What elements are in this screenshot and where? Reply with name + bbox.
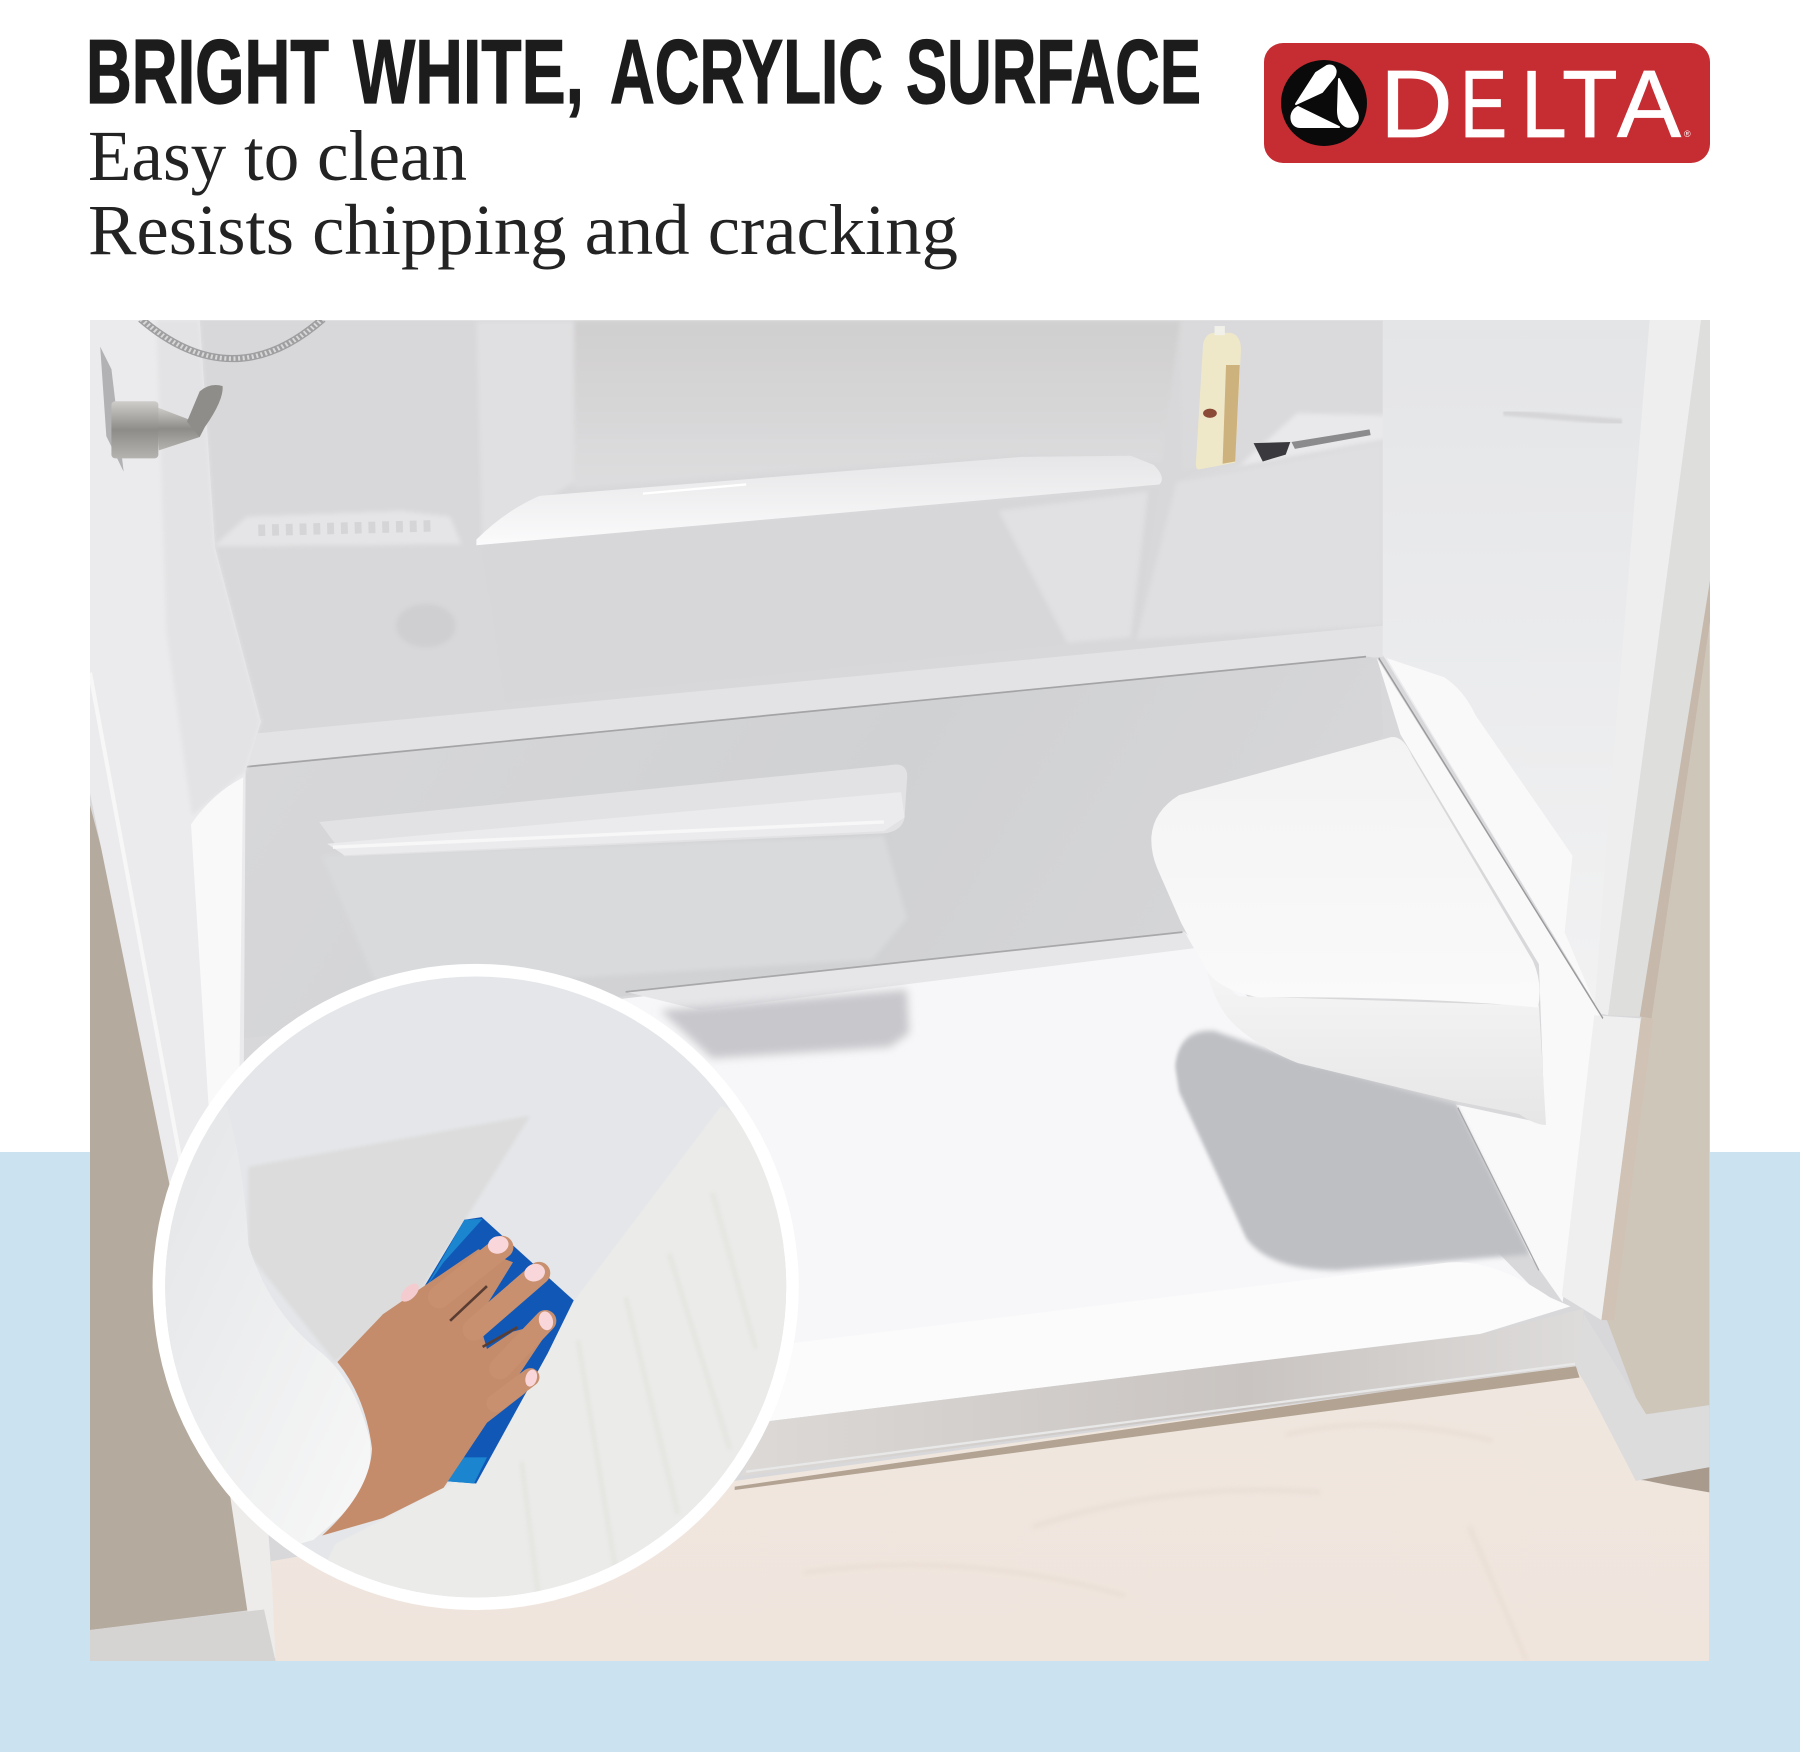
finger gaps	[450, 1286, 487, 1321]
left wall white sliver	[191, 778, 243, 1195]
sleeve	[157, 1106, 370, 1557]
pan apron	[740, 1309, 1584, 1476]
faucet taper	[156, 407, 200, 450]
door trim lower	[1562, 1015, 1641, 1320]
logo: Delta	[1264, 43, 1710, 163]
logo wordmark: E	[1460, 50, 1507, 158]
background: light blue band	[0, 1152, 1800, 1752]
towel bar ghost	[1503, 412, 1622, 422]
right beige wall	[1603, 585, 1709, 1419]
marble streaks	[522, 1193, 756, 1601]
left door trim	[230, 1492, 278, 1661]
back shelf shadow	[660, 990, 909, 1058]
right corner shelf	[1243, 414, 1382, 465]
logo wordmark: L	[1521, 50, 1567, 157]
title: ACRYLIC	[610, 22, 883, 123]
panel: cleaning close-up circle	[140, 950, 820, 1630]
pan front lip	[769, 1262, 1570, 1421]
clean surface	[140, 950, 820, 1630]
small back shelf	[319, 765, 907, 990]
dirty surface right	[305, 1106, 799, 1609]
hose	[141, 319, 323, 359]
left baseboard	[90, 1609, 276, 1661]
back wall base	[90, 320, 1710, 1663]
pan side edge	[1458, 1108, 1539, 1270]
side wall shade	[246, 766, 250, 768]
icon: Delta emblem	[1281, 60, 1367, 146]
baseboard shadow	[1636, 1467, 1709, 1492]
wide ledge	[243, 626, 1383, 767]
ledge edge line	[246, 657, 1366, 767]
seat shadow	[1175, 1031, 1529, 1270]
title: SURFACE	[906, 22, 1201, 123]
soap dish left	[214, 511, 461, 546]
title	[86, 22, 1201, 123]
razor	[1254, 429, 1371, 461]
logo wordmark: A	[1617, 51, 1681, 158]
right wall	[1383, 320, 1652, 1015]
subtitle line: resists chipping and cracking: Resists chipping and cracking	[88, 190, 958, 270]
floor	[271, 1366, 1709, 1661]
faucet plate	[100, 347, 124, 472]
title: BRIGHT	[86, 22, 329, 123]
logo wordmark: D	[1380, 50, 1453, 157]
panel: left jamb and faucet	[90, 319, 323, 1195]
door trim tan strip	[1640, 575, 1717, 1018]
seam line	[1379, 658, 1603, 1018]
floor wood tone	[804, 1425, 1527, 1661]
left beige wall	[90, 804, 255, 1630]
circle white ring	[153, 964, 799, 1610]
panel: seat and right wall	[1151, 320, 1717, 1320]
floor shadow under pan	[735, 1364, 1580, 1490]
faucet body	[111, 401, 158, 458]
bottle	[1196, 326, 1241, 470]
seat underside	[1225, 996, 1546, 1125]
jamb edge highlight	[90, 673, 187, 1195]
upper long shelf	[476, 456, 1162, 545]
panel: pan lip, apron and baseboard	[740, 1262, 1709, 1481]
upper wall panels	[400, 320, 1178, 643]
logo wordmark: ®	[1684, 129, 1691, 139]
title: WHITE,	[353, 22, 584, 123]
dirty patch left	[248, 1116, 530, 1362]
subtitle line: easy to clean: Easy to clean	[88, 116, 467, 196]
sponge	[422, 1217, 574, 1483]
logo wordmark	[1380, 50, 1691, 158]
faucet lever	[187, 385, 223, 437]
panel: shower photo illustration	[90, 319, 1717, 1663]
pan back curb	[626, 932, 1194, 1010]
pan floor	[622, 932, 1529, 1343]
door frame inner face	[1594, 320, 1705, 1015]
seat top	[1151, 737, 1540, 1008]
lower recessed wall	[897, 656, 1372, 704]
nails	[486, 1234, 511, 1256]
hand	[322, 1234, 555, 1535]
seat back panel	[1387, 658, 1594, 1002]
right baseboard	[1576, 1314, 1709, 1481]
logo wordmark: T	[1562, 50, 1618, 158]
close-up contents	[140, 950, 820, 1630]
side wall and jamb	[90, 320, 261, 1195]
door frame outer face	[1612, 320, 1710, 985]
seat panel below line	[1377, 658, 1603, 1302]
